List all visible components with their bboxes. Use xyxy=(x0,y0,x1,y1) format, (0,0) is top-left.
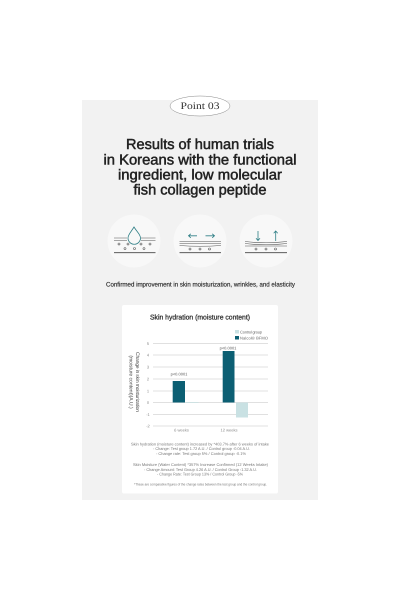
note: test results: Skin hydration (moisture content) increased by *403.7% after 6 weeks of intake xyxy=(131,442,270,446)
legend xyxy=(235,329,268,340)
y-axis label: (moisture content)(A.U.) xyxy=(128,355,134,409)
bar chart: 6 weeks xyxy=(174,428,189,432)
bar chart: -1 xyxy=(146,412,151,417)
badge: Point 03 xyxy=(170,96,230,116)
icon: moisture xyxy=(108,214,160,268)
note: test results: - Change rate: Test group 5% / Control group -0.1% xyxy=(156,451,246,456)
bar chart: 4 xyxy=(147,352,150,358)
bar chart: p<0.0001 xyxy=(171,372,188,376)
bar chart: 12 weeks xyxy=(221,428,237,432)
bar chart: 1 xyxy=(147,388,150,394)
chart title: Skin hydration (moisture content) xyxy=(150,314,250,322)
bar chart: p<0.0001 xyxy=(220,346,237,350)
bar chart: -2 xyxy=(146,424,151,428)
icon: wrinkles xyxy=(174,214,226,268)
note: test results xyxy=(131,442,270,486)
note: test results: - Change Amount: Test Group 4.26 A.U. / Control Group -1.32 A.U. xyxy=(144,467,257,472)
title: ingredient, low molecular xyxy=(118,168,282,184)
title xyxy=(104,137,296,198)
bar chart: 2 xyxy=(147,376,150,382)
bar chart: 0 xyxy=(147,400,150,405)
title: in Koreans with the functional xyxy=(104,152,296,168)
y-axis label: Change in skin moisturization xyxy=(134,352,140,412)
title: Results of human trials xyxy=(126,137,274,153)
bar chart: 5 xyxy=(147,341,150,346)
panel: chart card xyxy=(122,305,278,494)
title: fish collagen peptide xyxy=(134,182,266,198)
panel: grey background xyxy=(82,100,318,500)
note: test results: - Change Rate: Test Group 13% / Control Group -5% xyxy=(157,472,243,476)
bar chart: 3 xyxy=(147,364,150,370)
legend: Control group xyxy=(240,329,263,334)
note: test results: Skin Moisture (Water Content) *357% Increase Confirmed (12 Weeks Intake) xyxy=(133,462,269,467)
icon: elasticity xyxy=(240,214,292,268)
subtitle: Confirmed improvement in skin moisturization, wrinkles, and elasticity xyxy=(106,282,296,288)
badge: Point 03: Point 03 xyxy=(180,101,220,112)
note: test results: - Change: Test group 1.72 A.U. / Control group -0.04 A.U. xyxy=(153,446,250,451)
footnote: *These are comparative figures of the change rates between the test group and the control group. xyxy=(134,482,267,486)
legend: Nalcol® BFMO xyxy=(240,335,268,340)
bar chart xyxy=(128,341,268,432)
